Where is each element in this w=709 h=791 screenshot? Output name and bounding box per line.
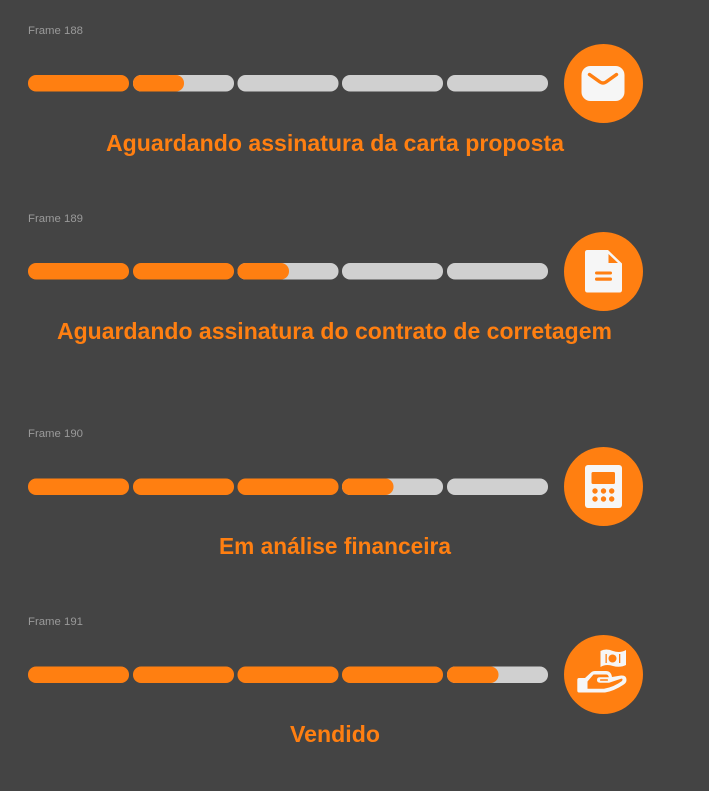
heading 189: Aguardando assinatura do contrato de corretagem [57, 318, 612, 344]
frame label 189: Frame 189 [28, 213, 83, 225]
panel: frame 191 [28, 616, 643, 747]
heading 190: Em análise financeira [219, 533, 451, 559]
progress bar 191 [28, 666, 548, 683]
progress bar 190 [28, 478, 548, 495]
progress bar 189 [28, 263, 548, 280]
panel: frame 189 [28, 213, 643, 344]
panel: frame 188 [28, 25, 643, 156]
icon: hand with money [564, 635, 643, 714]
frame label 188: Frame 188 [28, 25, 83, 37]
icon: calculator [564, 447, 643, 526]
icon: document [564, 232, 643, 311]
heading 191: Vendido [290, 721, 380, 747]
heading 188: Aguardando assinatura da carta proposta [106, 130, 564, 156]
frame label 191: Frame 191 [28, 616, 83, 628]
progress bar 188 [28, 75, 548, 92]
icon: envelope [564, 44, 643, 123]
panel: frame 190 [28, 428, 643, 559]
frame label 190: Frame 190 [28, 428, 83, 440]
